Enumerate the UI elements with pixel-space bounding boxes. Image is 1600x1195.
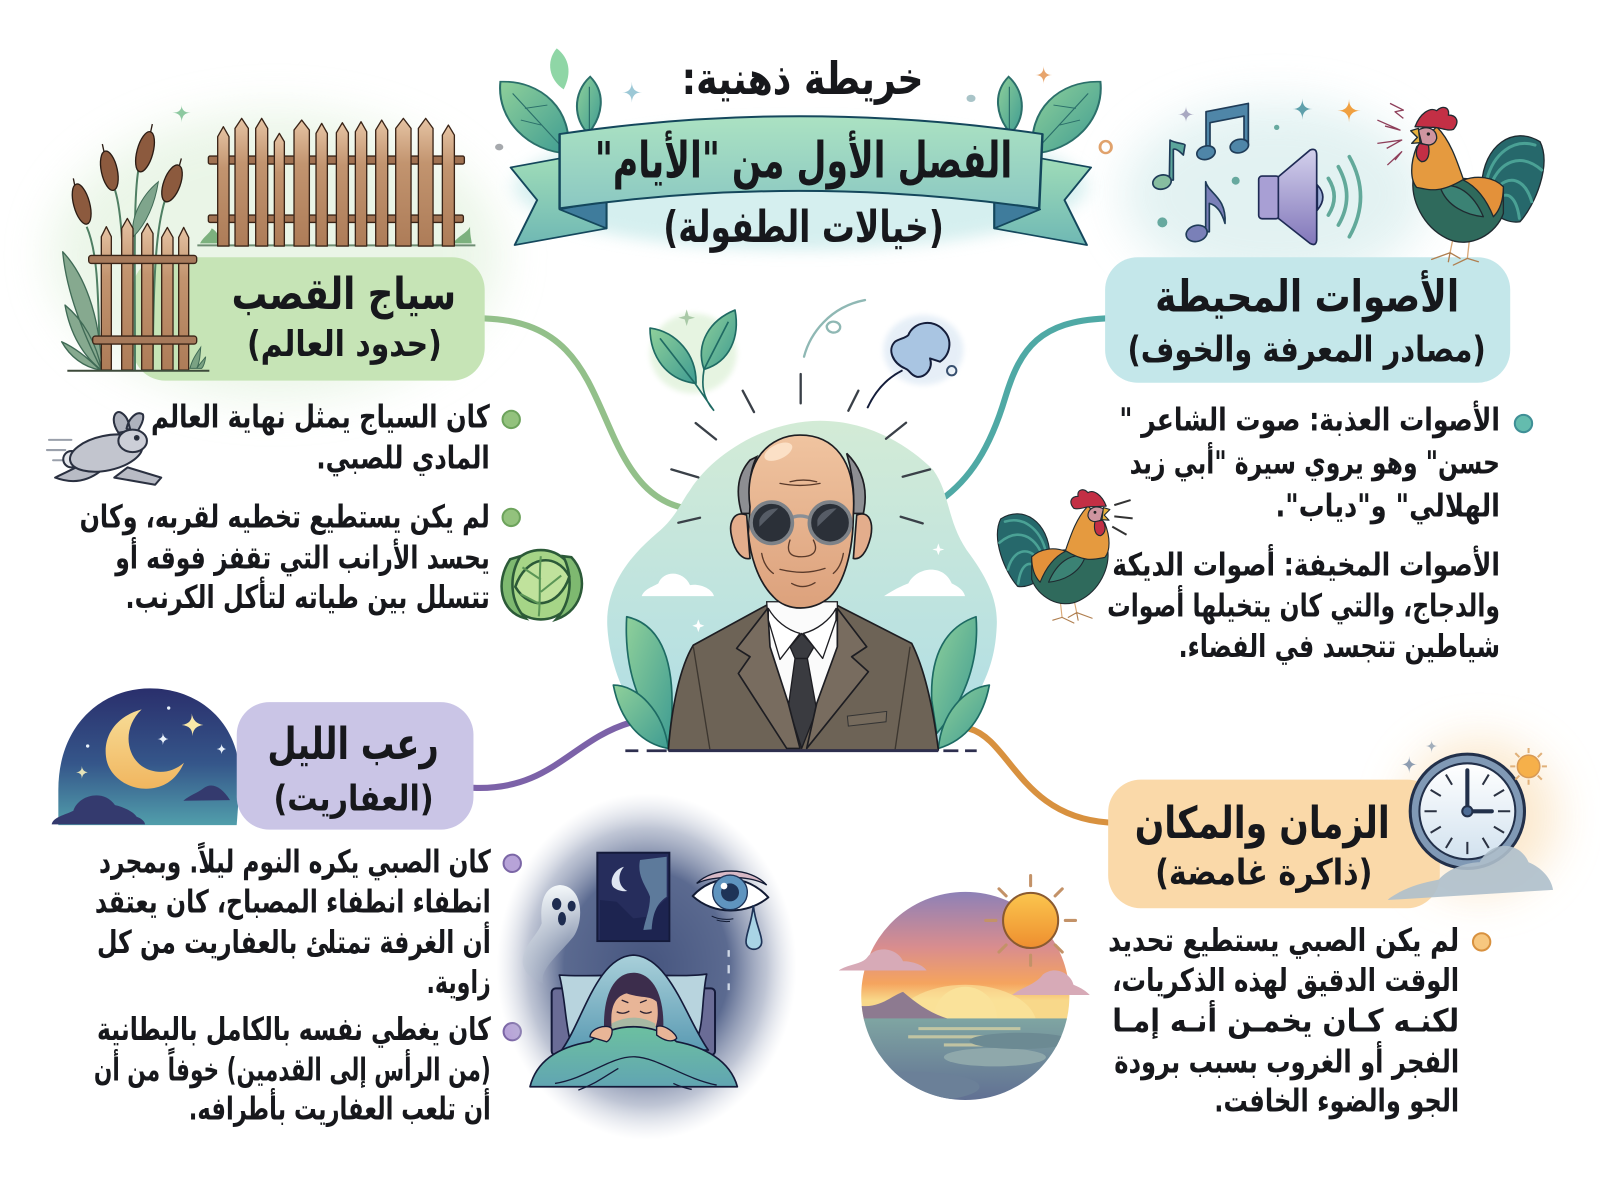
subheading: night: (العفاريت)	[273, 778, 434, 819]
panel: sounds	[997, 98, 1544, 665]
panel pill: night	[237, 702, 473, 830]
icon: rooster small	[997, 490, 1110, 623]
bullet text: night: كان الصبي يكره النوم ليلاً. وبمجرد	[99, 841, 491, 881]
bullet text: time: لكنـه كـان يخمـن أنـه إمـا	[1112, 1001, 1459, 1040]
subheading: fence: (حدود العالم)	[247, 324, 442, 365]
connector: time branch	[969, 729, 1108, 822]
heading: time: الزمان والمكان	[1135, 798, 1390, 849]
title block	[495, 48, 1111, 253]
heading: night: رعب الليل	[267, 719, 439, 770]
bullet text: night	[94, 841, 521, 1127]
illustration: reeds and small fence	[62, 105, 209, 371]
panel pill: fence	[133, 257, 485, 381]
panel pill: sounds	[1105, 257, 1510, 383]
bullet text: fence: تتسلل بين طياته لتأكل الكرنب.	[126, 577, 490, 616]
bullet text: sounds	[1107, 401, 1532, 665]
background glow: fence	[51, 112, 500, 398]
blob background	[607, 421, 997, 750]
icon: clock	[1410, 754, 1524, 868]
subheading: sounds: (مصادر المعرفة والخوف)	[1128, 329, 1486, 370]
idea rays	[671, 374, 930, 523]
man: suit	[668, 602, 938, 750]
panel pill: time	[1108, 780, 1440, 908]
panel: time and place	[837, 740, 1553, 1119]
illustration: notes and speaker	[1151, 98, 1403, 245]
illustration: night sky	[52, 688, 240, 825]
illustration: frightened boy in bed	[497, 793, 797, 1140]
man: head	[731, 435, 872, 608]
title banner illustration	[495, 48, 1111, 250]
icon: rabbit	[47, 412, 161, 485]
bullet text: fence: المادي للصبي.	[316, 440, 490, 476]
bullet text: sounds: الأصوات المخيفة: أصوات الديكة	[1112, 545, 1500, 584]
bullet text: night: كان يغطي نفسه بالكامل بالبطانية	[97, 1012, 491, 1048]
icon: small sun and sparkles	[1401, 740, 1547, 785]
bullet text: sounds: شياطين تتجسد في الفضاء.	[1179, 629, 1500, 665]
bullet text: time	[1108, 923, 1490, 1119]
side leaves	[613, 617, 989, 748]
bullet text: night: (من الرأس إلى القدمين) خوفاً من أن	[94, 1047, 491, 1089]
bullet text: night: أن الغرفة تمتلئ بالعفاريت من كل	[97, 922, 491, 961]
bullet text: fence: يحسد الأرانب التي تقفز فوقه أو	[114, 537, 490, 576]
bullet text: time: الفجر أو الغروب بسبب برودة	[1114, 1041, 1459, 1080]
panel: night	[52, 688, 797, 1140]
bullet text: sounds: الهلالي" و"دياب".	[1276, 488, 1500, 524]
illustration: sunset	[837, 876, 1090, 1105]
icon: thought cloud	[868, 315, 963, 407]
connector: night branch	[473, 722, 631, 788]
bullet text: time: الجو والضوء الخافت.	[1214, 1083, 1459, 1119]
bullet text: time: الوقت الدقيق لهذه الذكريات،	[1112, 963, 1459, 999]
connector: fence branch	[485, 318, 681, 507]
title line 3: (خيالات الطفولة)	[663, 202, 944, 253]
bullet text: sounds: الأصوات العذبة: صوت الشاعر "	[1119, 401, 1500, 439]
icon: cabbage	[502, 550, 582, 619]
icon: leaf sprout	[650, 309, 737, 411]
ground line	[625, 747, 977, 755]
icon: rooster large	[1411, 107, 1544, 265]
icon: crow lines	[1112, 500, 1133, 535]
icon: cloud under clock	[1388, 846, 1553, 900]
connector: sounds branch	[941, 318, 1105, 500]
central figure	[607, 300, 997, 751]
title line 2: الفصل الأول من "الأيام"	[595, 130, 1012, 191]
heading: sounds: الأصوات المحيطة	[1155, 269, 1459, 322]
bullet text: time: لم يكن الصبي يستطيع تحديد	[1108, 923, 1459, 959]
heading: fence: سياج القصب	[232, 269, 456, 320]
bullet text: fence: كان السياج يمثل نهاية العالم	[151, 400, 490, 436]
icon: swirl	[804, 300, 865, 357]
subheading: time: (ذاكرة غامضة)	[1155, 853, 1372, 894]
panel: fence	[47, 105, 582, 619]
bullet text: fence	[80, 400, 520, 616]
clouds in blob	[642, 543, 965, 632]
bullet text: night: زاوية.	[427, 965, 491, 1001]
background glow: sounds	[1122, 102, 1429, 286]
title line 1: خريطة ذهنية:	[682, 52, 923, 105]
bullet text: fence: لم يكن يستطيع تخطيه لقربه، وكان	[80, 500, 490, 536]
background glow: clock	[1403, 740, 1556, 893]
bullet text: night: انطفاء انطفاء المصباح، كان يعتقد	[95, 884, 491, 920]
illustration: long fence	[197, 118, 475, 246]
bullet text: night: أن تلعب العفاريت بأطرافه.	[189, 1088, 491, 1127]
